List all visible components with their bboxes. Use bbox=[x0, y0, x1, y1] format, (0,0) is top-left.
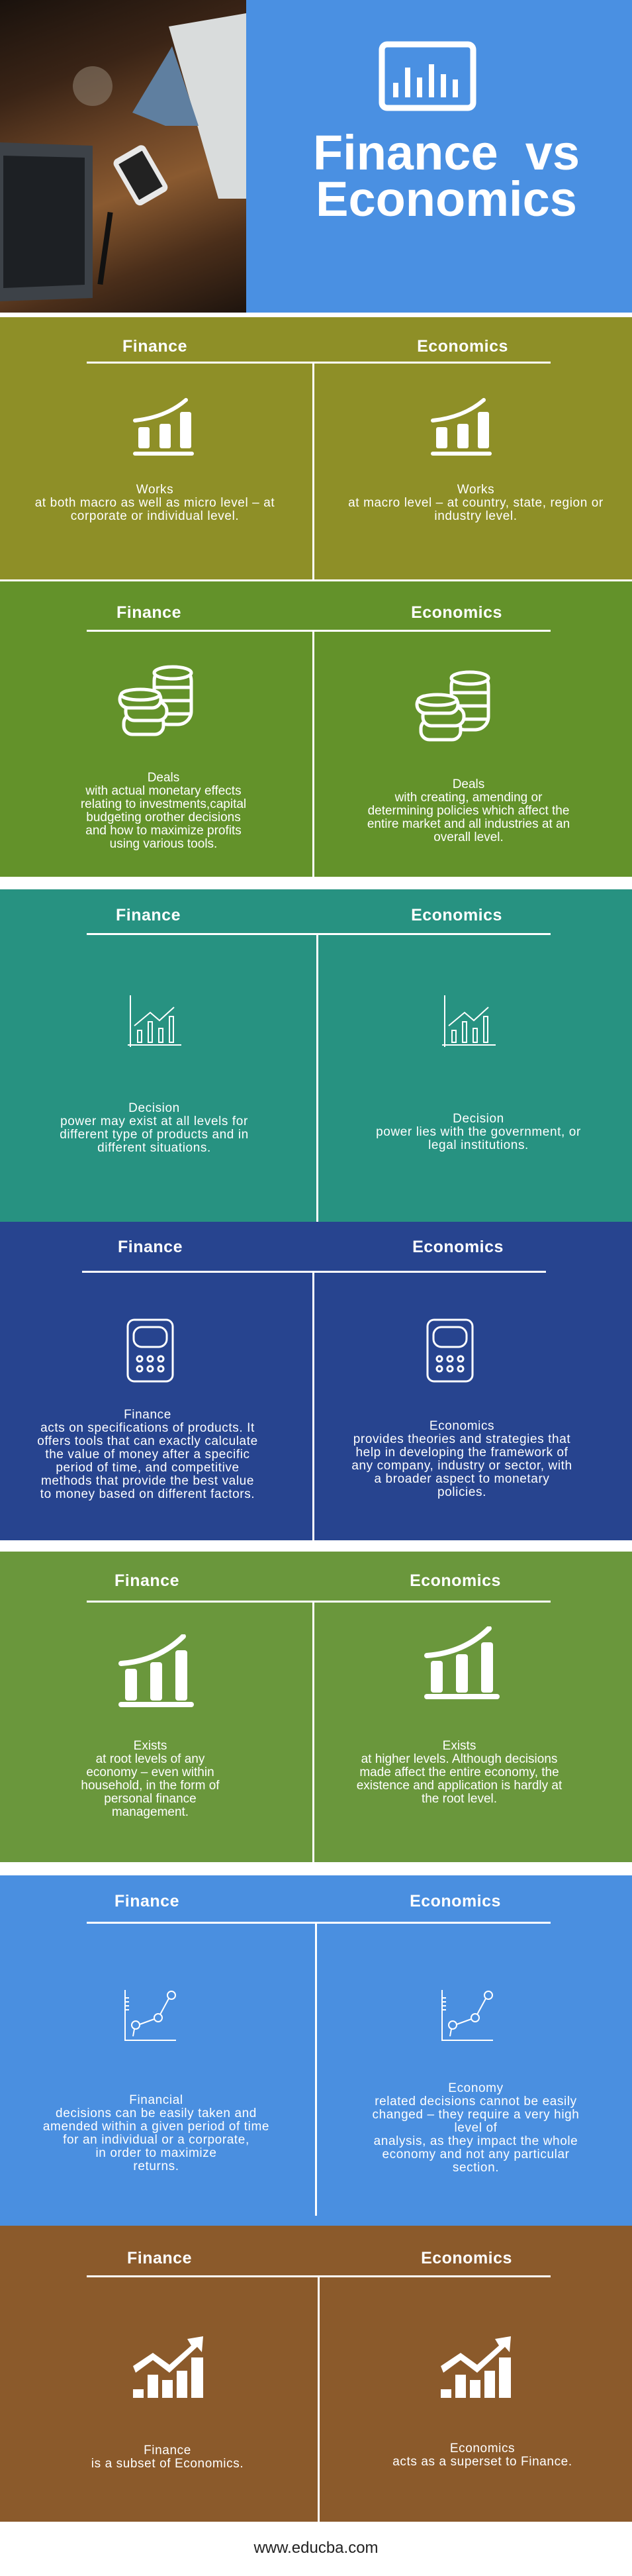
text: economics deals: Deals bbox=[453, 777, 484, 791]
text: finance decision bbox=[60, 1101, 249, 1155]
text: finance decisions bbox=[43, 2093, 269, 2173]
text: finance exists: household, in the form of bbox=[81, 1779, 220, 1793]
text: economics decisions: related decisions cannot be easily bbox=[375, 2095, 577, 2108]
panel: deals bbox=[0, 581, 632, 877]
text: finance exists: Exists bbox=[134, 1739, 167, 1753]
heading: economics: Economics bbox=[421, 2249, 512, 2267]
text: economics exists: existence and application is hardly at bbox=[357, 1779, 562, 1793]
text: finance works: corporate or individual level. bbox=[71, 509, 239, 523]
text: finance deals bbox=[81, 771, 246, 851]
icon: rising arrow bars right bbox=[441, 2336, 511, 2398]
icon: chart screen bbox=[379, 41, 476, 111]
text: finance exists: economy – even within bbox=[86, 1765, 214, 1779]
text: economics superset bbox=[392, 2442, 572, 2469]
footer: website: www.educba.com bbox=[253, 2539, 379, 2557]
text: economics decisions: changed – they require a very high bbox=[372, 2108, 579, 2122]
text: finance decisions: Financial bbox=[129, 2093, 183, 2107]
text: finance deals: Deals bbox=[148, 771, 179, 785]
text: finance decision: Decision bbox=[128, 1101, 180, 1115]
text: finance decisions: for an individual or a corporate, bbox=[63, 2133, 249, 2147]
heading: finance: Finance bbox=[118, 1238, 183, 1256]
text: economics deals: with creating, amending or bbox=[395, 791, 542, 805]
icon: point chart right bbox=[441, 1990, 493, 2041]
text: economics decisions: level of bbox=[454, 2121, 498, 2135]
text: economics works: Works bbox=[457, 483, 494, 497]
text: finance decision: different situations. bbox=[97, 1141, 211, 1155]
icon: growth bars right bbox=[431, 398, 492, 456]
text: finance deals: budgeting orother decisions bbox=[86, 811, 241, 824]
text: economics decision: Decision bbox=[453, 1112, 504, 1126]
icon: coins left bbox=[118, 665, 193, 736]
text: economics provides: policies. bbox=[437, 1485, 486, 1499]
heading: finance: Finance bbox=[122, 337, 187, 356]
heading: economics: Economics bbox=[411, 906, 502, 924]
text: finance decision: power may exist at all levels for bbox=[60, 1115, 248, 1128]
text: finance exists: personal finance bbox=[104, 1792, 197, 1806]
icon: coins right bbox=[416, 670, 490, 742]
icon: line chart right bbox=[442, 995, 496, 1047]
photo: desk with laptop bbox=[0, 0, 246, 313]
text: finance decision: different type of products and in bbox=[60, 1128, 249, 1142]
text: finance acts: acts on specifications of products. It bbox=[40, 1421, 255, 1435]
icon: calculator left bbox=[127, 1319, 173, 1383]
header bbox=[0, 0, 632, 313]
icon: rising arrow bars left bbox=[133, 2336, 203, 2398]
text: finance acts: the value of money after a specific bbox=[45, 1448, 250, 1461]
text: economics exists: at higher levels. Although decisions bbox=[361, 1752, 557, 1766]
title bbox=[313, 125, 580, 226]
text: finance deals: with actual monetary effects bbox=[85, 784, 242, 798]
text: finance acts: offers tools that can exactly calculate bbox=[37, 1434, 258, 1448]
text: economics provides: Economics bbox=[429, 1419, 494, 1433]
heading: economics: Economics bbox=[410, 1892, 501, 1910]
text: economics exists: Exists bbox=[443, 1739, 476, 1753]
text: economics provides: provides theories and strategies that bbox=[353, 1432, 570, 1446]
text: finance works: Works bbox=[136, 483, 173, 497]
icon: growth bars right bbox=[424, 1626, 500, 1699]
panel: subset bbox=[0, 2226, 632, 2522]
text: economics decisions: section. bbox=[453, 2161, 499, 2175]
text: finance decisions: amended within a given period of time bbox=[43, 2120, 269, 2134]
icon: line chart left bbox=[128, 995, 181, 1047]
icon: growth bars left bbox=[133, 398, 194, 456]
panel: exists bbox=[0, 1552, 632, 1862]
text: economics decisions: Economy bbox=[448, 2081, 504, 2095]
heading: finance: Finance bbox=[116, 603, 181, 622]
text: finance decisions: returns. bbox=[133, 2159, 179, 2173]
title panel bbox=[246, 0, 632, 313]
text: economics superset: Economics bbox=[450, 2442, 515, 2455]
text: finance subset bbox=[91, 2444, 244, 2471]
text: finance acts: to money based on different factors. bbox=[40, 1487, 255, 1501]
text: economics deals: determining policies which affect the bbox=[368, 804, 569, 818]
text: finance deals: and how to maximize profits bbox=[85, 824, 242, 838]
heading: finance: Finance bbox=[127, 2249, 192, 2267]
text: economics decisions: analysis, as they impact the whole bbox=[374, 2134, 578, 2148]
icon: calculator right bbox=[426, 1319, 474, 1383]
text: finance subset: is a subset of Economics. bbox=[91, 2457, 244, 2471]
heading: economics: Economics bbox=[412, 1238, 504, 1256]
text: economics deals: overall level. bbox=[433, 830, 504, 844]
title: Economics bbox=[316, 172, 577, 226]
text: economics deals: entire market and all industries at an bbox=[367, 817, 570, 831]
text: finance subset: Finance bbox=[144, 2444, 191, 2457]
panel: works level bbox=[0, 317, 632, 579]
text: finance works bbox=[35, 483, 275, 523]
heading: finance: Finance bbox=[116, 906, 181, 924]
text: economics decision bbox=[376, 1112, 581, 1152]
text: economics provides: any company, industry or sector, with bbox=[351, 1459, 572, 1473]
text: finance acts bbox=[37, 1408, 258, 1501]
text: economics superset: acts as a superset to Finance. bbox=[392, 2455, 572, 2469]
text: finance decisions: decisions can be easily taken and bbox=[56, 2106, 257, 2120]
icon: growth bars left bbox=[118, 1634, 194, 1707]
title: Finance vs bbox=[313, 125, 580, 180]
text: finance exists bbox=[81, 1739, 220, 1819]
text: economics exists bbox=[357, 1739, 563, 1806]
text: economics provides bbox=[351, 1419, 572, 1499]
text: finance exists: management. bbox=[112, 1805, 189, 1819]
text: economics provides: a broader aspect to monetary bbox=[375, 1472, 549, 1486]
heading: finance: Finance bbox=[114, 1892, 179, 1910]
text: economics decision: legal institutions. bbox=[428, 1138, 529, 1152]
text: economics exists: made affect the entire economy, the bbox=[359, 1765, 559, 1779]
text: economics decisions bbox=[372, 2081, 579, 2175]
heading: economics: Economics bbox=[417, 337, 508, 356]
text: economics works: industry level. bbox=[434, 509, 518, 523]
text: economics provides: help in developing the framework of bbox=[356, 1446, 568, 1460]
text: finance exists: at root levels of any bbox=[96, 1752, 204, 1766]
icon: point chart left bbox=[124, 1990, 176, 2041]
text: economics decision: power lies with the government, or bbox=[376, 1125, 581, 1139]
text: economics exists: the root level. bbox=[422, 1792, 497, 1806]
panel: decisions change bbox=[0, 1875, 632, 2226]
heading: finance: Finance bbox=[114, 1571, 179, 1590]
heading: economics: Economics bbox=[411, 603, 502, 622]
text: finance works: at both macro as well as micro level – at bbox=[35, 496, 275, 510]
panel: acts on bbox=[0, 1222, 632, 1540]
text: finance acts: Finance bbox=[124, 1408, 171, 1422]
heading: economics: Economics bbox=[410, 1571, 501, 1590]
text: economics deals bbox=[367, 777, 570, 844]
text: economics decisions: economy and not any particular bbox=[382, 2148, 570, 2161]
text: finance decisions: in order to maximize bbox=[95, 2146, 217, 2160]
text: finance acts: methods that provide the best value bbox=[41, 1474, 254, 1488]
text: finance deals: using various tools. bbox=[110, 837, 217, 851]
text: economics works: at macro level – at country, state, region or bbox=[348, 496, 604, 510]
panel: decision power bbox=[0, 889, 632, 1222]
text: finance acts: period of time, and competitive bbox=[56, 1461, 240, 1475]
text: economics works bbox=[348, 483, 604, 523]
text: finance deals: relating to investments,capital bbox=[81, 797, 246, 811]
